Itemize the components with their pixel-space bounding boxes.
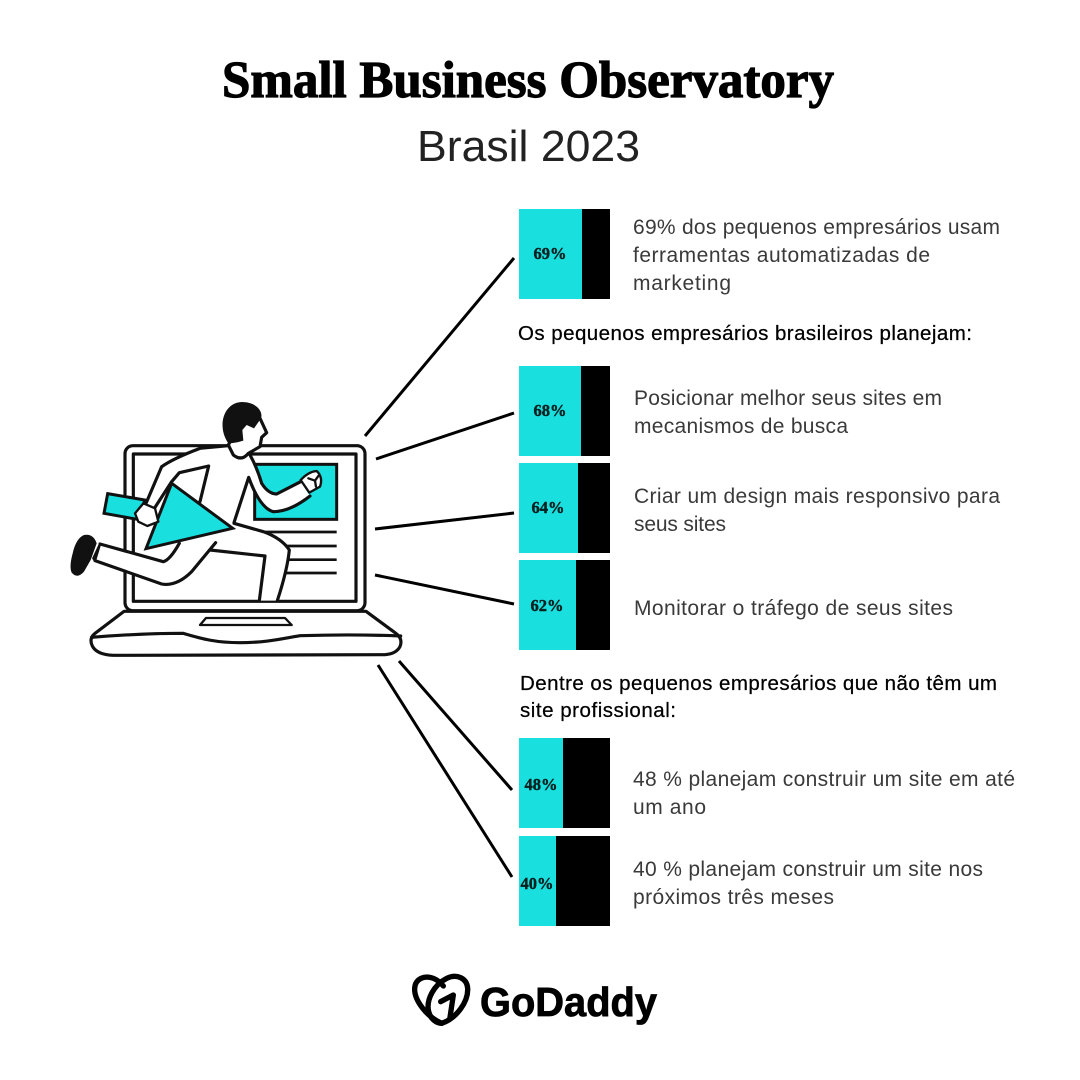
stat text: mecanismos de busca	[634, 415, 848, 438]
stat text: um ano	[633, 796, 706, 819]
illustration: person running out of a laptop	[71, 402, 401, 655]
stat text	[633, 768, 1015, 819]
stat: 68% search	[519, 366, 942, 456]
stat text: seus sites	[634, 513, 726, 536]
stat text: ferramentas automatizadas de	[633, 244, 930, 267]
screen text lines	[263, 532, 337, 573]
connector lines	[365, 258, 514, 877]
person legs	[95, 523, 289, 601]
stat text	[634, 485, 1000, 536]
bar 62%	[519, 560, 610, 650]
heading: no professional site: Dentre os pequenos empresários que não têm um	[520, 672, 997, 695]
bar 69%: 69%	[534, 244, 566, 263]
stat: 40% three months	[519, 836, 983, 926]
stat: 69% automation tools	[519, 209, 1000, 299]
bar 40%: 40%	[520, 874, 554, 893]
cyan rectangle	[104, 494, 145, 519]
fist	[301, 471, 321, 493]
person torso and arms	[146, 445, 310, 523]
heading: no professional site: site profissional:	[520, 699, 676, 722]
stat: 64% responsive	[519, 463, 1000, 553]
laptop base	[91, 611, 401, 655]
laptop screen	[125, 446, 365, 611]
stat text: 69% dos pequenos empresários usam	[633, 216, 1000, 239]
bar 69%	[519, 209, 610, 299]
stat: 48% one year	[519, 738, 1015, 828]
bar 64%: 64%	[532, 498, 564, 517]
bar 62%: 62%	[530, 596, 564, 615]
bar 48%: 48%	[524, 775, 558, 794]
stat text: 48 % planejam construir um site em até	[633, 768, 1015, 791]
bar 40%	[519, 836, 610, 926]
head	[223, 402, 267, 458]
stat text: Criar um design mais responsivo para	[634, 485, 1000, 508]
subtitle: Brasil 2023	[417, 122, 640, 171]
heading: plans: Os pequenos empresários brasileiros planejam:	[518, 322, 972, 345]
stat text: Posicionar melhor seus sites em	[634, 387, 942, 410]
bar 64%	[519, 463, 610, 553]
heading: no professional site	[520, 672, 997, 722]
cyan triangle	[146, 483, 233, 549]
icon: heart	[415, 976, 468, 1023]
stat text	[633, 216, 1000, 295]
stat: 62% traffic	[519, 560, 953, 650]
shoe	[71, 535, 97, 576]
hand	[135, 503, 158, 526]
sock	[93, 544, 100, 561]
bar 68%	[519, 366, 610, 456]
title: Small Business Observatory	[222, 52, 834, 109]
wordmark: GoDaddy	[480, 979, 657, 1025]
bar 68%: 68%	[534, 401, 566, 420]
logo: GoDaddy	[415, 976, 657, 1025]
stat text: próximos três meses	[633, 886, 834, 909]
stat text	[633, 858, 983, 909]
stat text	[634, 387, 942, 438]
bar 48%	[519, 738, 610, 828]
stat text: 40 % planejam construir um site nos	[633, 858, 983, 881]
stat text: marketing	[633, 272, 731, 295]
screen cyan panel	[255, 464, 337, 519]
stat text: Monitorar o tráfego de seus sites	[634, 597, 953, 620]
